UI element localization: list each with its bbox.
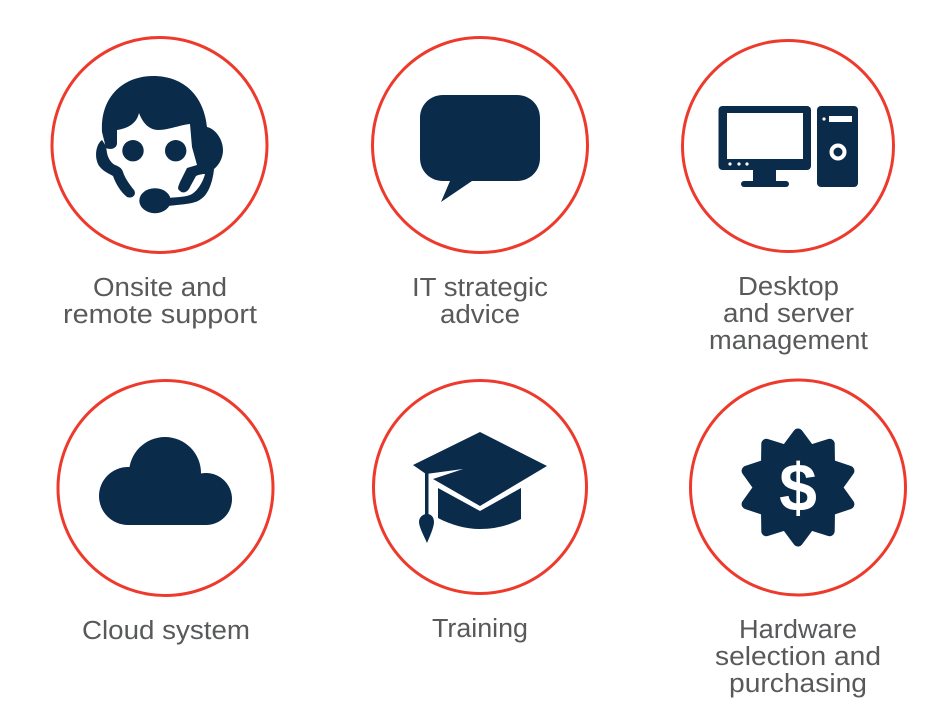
label	[412, 274, 548, 329]
label: purchasing	[729, 670, 867, 698]
label: IT strategic	[412, 274, 548, 302]
icon: graduation cap	[413, 432, 547, 543]
icon: speech bubble	[420, 95, 540, 202]
label: remote support	[63, 301, 257, 329]
circle outline	[372, 38, 588, 252]
label: and server	[723, 300, 855, 328]
label: selection and	[715, 643, 881, 671]
panel: IT strategic advice	[372, 38, 588, 329]
circle outline	[682, 40, 894, 252]
circle outline	[690, 380, 906, 595]
circle outline	[58, 380, 273, 596]
panel: onsite and remote support	[52, 38, 267, 329]
label: advice	[440, 301, 520, 329]
label: Cloud system	[82, 617, 250, 645]
label	[63, 274, 257, 329]
label: Onsite and	[93, 274, 227, 302]
circle outline	[52, 38, 267, 252]
label: Training	[432, 615, 528, 643]
label	[715, 616, 881, 698]
panel: training	[374, 380, 586, 643]
icon: desktop computer and tower	[718, 106, 858, 187]
icon: dollar badge: $	[779, 450, 817, 526]
label: Desktop	[738, 273, 839, 301]
label: Hardware	[739, 616, 857, 644]
circle outline	[374, 380, 586, 594]
label: management	[709, 327, 868, 355]
label	[709, 273, 868, 355]
panel: cloud system	[58, 380, 273, 645]
icon: dollar badge	[747, 434, 849, 542]
panel: desktop and server management	[682, 40, 894, 355]
icon: support agent with headset	[96, 76, 223, 213]
icon: cloud	[99, 437, 232, 525]
panel: hardware selection and purchasing	[690, 380, 906, 698]
